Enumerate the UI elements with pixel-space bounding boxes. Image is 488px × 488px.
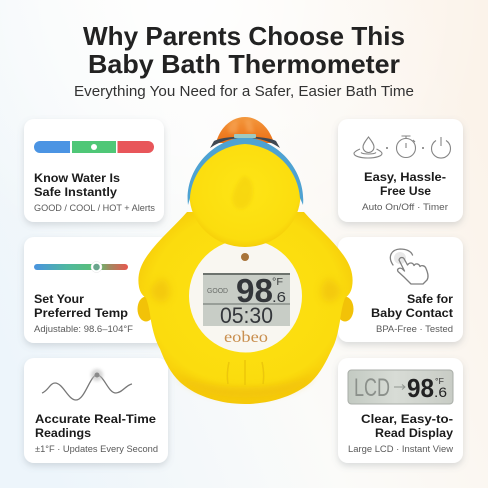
heading: preferred temp: Preferred Temp [34, 306, 128, 320]
heading: clear [361, 412, 453, 440]
icon: stopwatch [396, 136, 416, 158]
sensor dot [241, 253, 249, 261]
panel: safe contact [338, 237, 463, 342]
icon: water drop [354, 137, 382, 158]
title [83, 21, 405, 79]
icon: dot [422, 147, 424, 149]
icon: temperature slider [34, 262, 128, 272]
caption: accurate: ±1°F · Updates Every Second [35, 444, 158, 454]
LCD screen: 98 [236, 272, 273, 309]
duck flippers [138, 296, 354, 322]
heading: preferred temp: Set Your [34, 292, 84, 306]
goggle clip [234, 134, 256, 138]
icon: LCD sample: LCD [354, 374, 390, 402]
panel: accurate readings [24, 358, 168, 463]
icon: LCD sample: 98 [407, 373, 434, 403]
panel: clear display [338, 358, 463, 463]
heading: accurate: Accurate Real-Time [35, 412, 156, 426]
panel: easy to use [338, 119, 463, 222]
LCD screen: .6 [272, 289, 286, 306]
icon: LCD sample: .6 [434, 384, 447, 400]
icon: wave line [42, 369, 132, 400]
duck cap [210, 117, 280, 148]
heading: clear: Clear, Easy-to- [361, 412, 453, 426]
duck head [190, 143, 300, 247]
icon: LCD sample [348, 370, 453, 404]
icon: status bar [34, 141, 154, 153]
display face [189, 240, 302, 352]
LCD screen: GOOD [207, 288, 228, 295]
heading: easy: Easy, Hassle- [364, 170, 446, 184]
icon: LCD sample: °F [435, 377, 444, 386]
icon: dot [386, 147, 388, 149]
heading: know water [34, 171, 120, 199]
panel: know water is safe [24, 119, 164, 222]
title: Baby Bath Thermometer [88, 49, 400, 79]
heading: easy [364, 170, 446, 198]
heading: accurate [35, 412, 156, 440]
icon: power [432, 137, 450, 158]
subtitle: Everything You Need for a Safer, Easier Bath Time [74, 84, 414, 100]
LCD screen [203, 272, 290, 328]
caption: preferred temp: Adjustable: 98.6–104°F [34, 324, 134, 334]
brand logo: eobeo [224, 329, 268, 346]
panel: preferred temp [24, 237, 170, 343]
heading: clear: Read Display [375, 426, 453, 440]
heading: easy: Free Use [380, 184, 431, 198]
duck body [138, 212, 353, 404]
duck goggles band [188, 137, 303, 205]
icon: touch hand [390, 249, 428, 284]
caption: easy: Auto On/Off · Timer [362, 202, 448, 212]
heading: accurate: Readings [35, 426, 91, 440]
heading: preferred temp [34, 292, 128, 320]
caption: safe: BPA-Free · Tested [376, 324, 453, 334]
duck thermometer [138, 117, 354, 404]
caption: know water: GOOD / COOL / HOT + Alerts [34, 203, 156, 213]
title: Why Parents Choose This [83, 21, 405, 51]
heading: know water: Know Water Is [34, 171, 120, 185]
caption: clear: Large LCD · Instant View [348, 444, 454, 454]
heading: know water: Safe Instantly [34, 185, 117, 199]
heading: safe [371, 292, 453, 320]
LCD screen: °F [272, 277, 283, 288]
LCD screen: 05:30 [220, 303, 273, 328]
heading: safe: Baby Contact [371, 306, 453, 320]
duck ring folds [227, 360, 264, 385]
heading: safe: Safe for [407, 292, 453, 306]
duck wing shading [150, 278, 341, 398]
